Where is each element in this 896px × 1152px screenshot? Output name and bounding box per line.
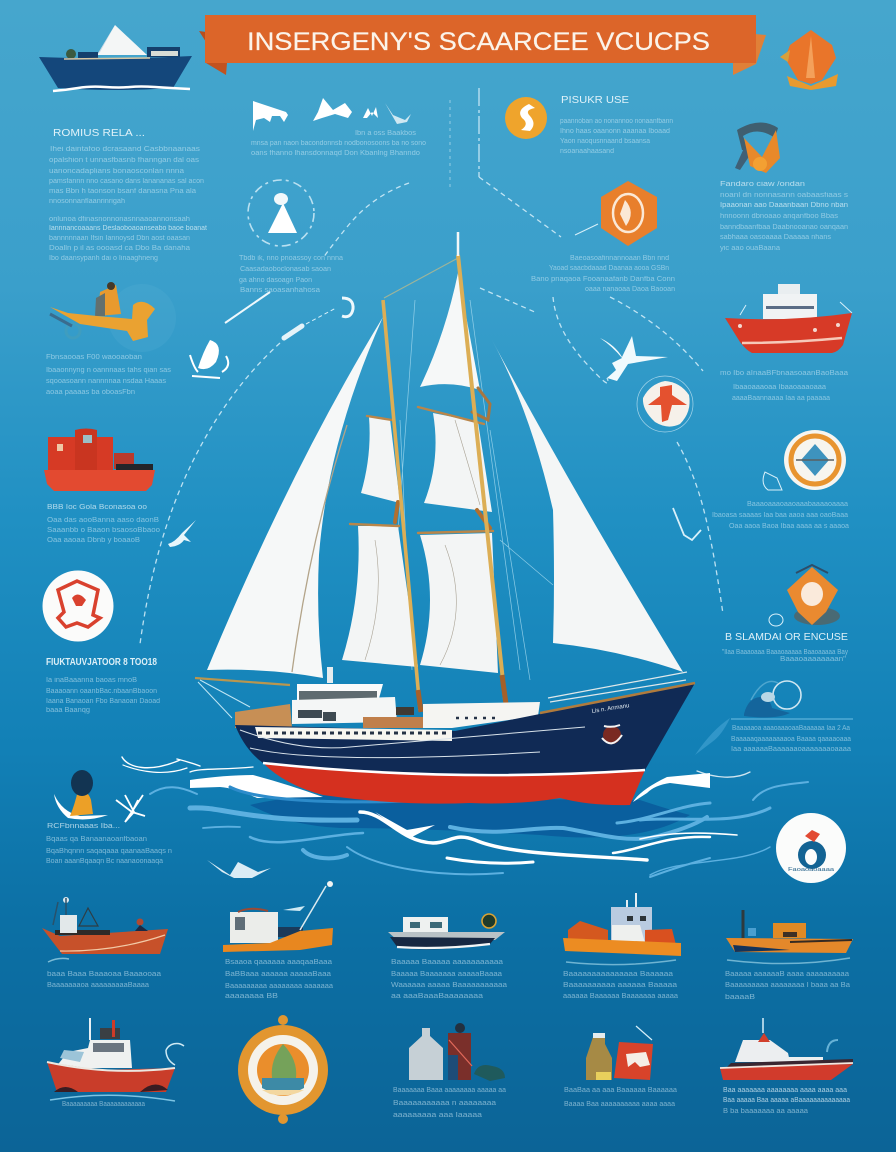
text block: boat 2: Bsaaoa qaaaaaa aaaqaaBaaa [225, 959, 332, 966]
text block: red ship bottom: B ba baaaaaaa aa aaaaa [723, 1108, 808, 1115]
text block: hexagon caption [531, 255, 675, 293]
text block: circle shield: Ia inaBaaanna baoas mnoB [46, 677, 137, 684]
hull stripes [240, 727, 585, 758]
icon: white circle logo [776, 813, 846, 883]
text block: top left: opalshion t unnasfbasnb fhanngan dal oas [49, 157, 200, 164]
text block: pisukr use [560, 95, 673, 155]
sail: main top [420, 273, 480, 390]
text block: top left: mas Bbn h taonson bsanf danasna Pna ala [49, 188, 196, 195]
text block: yellow boat: Ibaaonnyng n oannnaas tahs qian sas [46, 367, 172, 374]
text block: top left: Doalln p il as oooasd ca Dbo Ba danaha [49, 245, 190, 252]
icon: top right orange shield [780, 30, 838, 90]
text block: compass: Ibaoasa saaaas Iaa baa aaoa aaa oaoBaaa [712, 512, 848, 519]
text block: boat 2: Baaaaaaaaa aaaaaaaa aaaaaaa [225, 983, 333, 990]
text block: yellow boat: Fbnsaooas F00 waooaoban [46, 354, 142, 361]
sail: left jib [207, 317, 383, 678]
text block: boat 5: Baaaaa aaaaaaB aaaa aaaaaaaaaa [725, 971, 849, 978]
text block: boat 2: BaBBaaa aaaaaa aaaaaBaaa [225, 971, 331, 978]
text block: hexagon caption: Baeoasoafinnannoaan Bbn nnd [570, 255, 669, 262]
text block: boat 2: aaaaaaaa BB [225, 993, 278, 1000]
icon: boat 4 orange cargo boat [563, 893, 681, 965]
icon: red ship with white cabin [725, 284, 852, 353]
text block: emblem caption: Tbdb ik, nno pnoassoy con nnna [239, 255, 343, 262]
text block: top left: nnosonnanflaanrinrigah [49, 198, 125, 205]
text block: emblem caption: ga ahno dasoagn Paon [239, 277, 312, 284]
text block: top left: Iannnancoaaans Deslaoboaoanseabo baoe boanat [49, 225, 207, 232]
text block: hexagon caption: oaaa nanaoaa Daoa Baooan [585, 286, 675, 293]
text block: red barge [47, 504, 160, 544]
text block: hexagon caption: Yaoad saacbdaaad Daanaa aooa GSBn [549, 265, 669, 272]
heading: pennant: B SLAMDAI OR ENCUSE [725, 632, 848, 643]
sail: fore upper [361, 417, 400, 503]
text block: ring: Baaaaaoa aaaoaaaoaaBaaaaaa Iaa 2 Aa [732, 725, 850, 732]
text block: yellow boat: aoaa paaaas ba oboasFbn [46, 389, 135, 396]
text block: boat 3: aa aaaBaaaBaaaaaaaa [391, 993, 483, 1000]
icon: white check mark [673, 508, 701, 540]
icon: red barge [44, 428, 155, 491]
text block: ring: Baaaaaqaaaaaaaaoa Baaaa qaaaaoaaa [731, 736, 851, 743]
text block: red ship bottom: Baa aaaaaaa aaaaaaaa aaaa aaaa aaa [723, 1087, 847, 1094]
white boot stripe [263, 763, 645, 775]
title banner [199, 15, 766, 75]
title: INSERGENY'S SCAARCEE VCUCPS [247, 28, 710, 56]
text block: seated figure: RCFbnnaaas Iba... [47, 823, 120, 830]
text block: top left: Ibo daansypanh dai o Iinaaghneng [49, 255, 158, 262]
text block: pennant: Baaaoaaaaaaaan" [780, 656, 847, 663]
text block: red barge: Oaa das aooBanna aaso daonB [47, 517, 159, 524]
text block: bottle: Baaaaaaaaaaa n aaaaaaaa [393, 1100, 496, 1107]
icon: red passenger ship [720, 1018, 853, 1080]
mast: main [458, 255, 505, 700]
icon: boat 5 orange launch [726, 910, 853, 964]
text block: jug: BaaBaa aa aaa Baaaaaa Baaaaaa [564, 1087, 677, 1094]
dashed arc: left sweep [140, 343, 280, 644]
rigging [384, 258, 553, 680]
text block: top left: uanoncadaplians bonaosconlan nnna [49, 168, 184, 175]
text block: circle shield: Iaana Banaoan Fbo Banaoan Daoad [46, 698, 160, 705]
bow deck line [540, 683, 695, 713]
text block: ring [731, 719, 853, 753]
text block: right harness: yic aao ouaBaana [720, 245, 780, 252]
icon: white manta mark [207, 860, 271, 878]
bow rail [548, 672, 687, 702]
icon: orange hexagon badge [601, 181, 657, 246]
icon: blue streak [695, 718, 730, 755]
mast tip [457, 232, 459, 256]
text block: seated figure [46, 823, 172, 865]
dashed arcs: right sweeps [480, 288, 723, 614]
text block: boat 1: Baaaaaaaoa aaaaaaaaaBaaaa [47, 982, 149, 989]
superstructure [235, 667, 540, 728]
icon: boat 2 orange trawler [223, 881, 333, 952]
text block: right harness: Ipaaonan aao Daaanbaan Dbno nban [720, 202, 848, 209]
text block: right harness: noanl dn nonnasann oabaasfiaas s [720, 192, 849, 199]
text block: red barge: Saaanbb o Baaon bsaosoBbaoo [47, 527, 160, 534]
text block: top centre: mnsa pan naon bacondonnsb nodbonosoons ba no sono [251, 140, 426, 147]
text block: boat 1 [47, 971, 161, 989]
text block: boat 5 [725, 971, 850, 1001]
dashed arc: upper centre left [325, 183, 409, 256]
text block: jug [564, 1087, 677, 1108]
mast: fore [383, 300, 420, 710]
text block: red barge: BBB Ioc Gola Bconasoa oo [47, 504, 147, 511]
text block: jug: Baaaa Baa aaaaaaaaaa aaaa aaaa [564, 1101, 675, 1108]
text block: red barge: Oaa aaoaa Dbnb y boaaoB [47, 537, 140, 544]
hull windows strip [255, 727, 452, 741]
text block: red ship bottom [723, 1087, 850, 1115]
text block: bottle: aaaaaaaaa aaa Iaaaaa [393, 1112, 482, 1119]
text block: boat 3 [391, 959, 507, 1000]
text block: boat 4: Baaaaaaaaaaaaaaa Baaaaaa [563, 971, 673, 978]
sail: main middle [424, 413, 492, 512]
icon: small white bird mark [168, 520, 196, 547]
ship name: Lis n. Anmanu [591, 703, 630, 715]
anchor emblem [602, 725, 622, 744]
heading: top left: ROMIUS RELA ... [53, 128, 145, 139]
text block: hexagon caption: Bano pnaqaoa Fooanaafanb Danfba Conn [531, 276, 675, 283]
icon: white flying bird [600, 336, 668, 381]
text block: pisukr use: Ihno haas oaanonn aaanaa Iboaad [560, 128, 670, 135]
text block: emblem caption [239, 255, 343, 294]
text block: seated figure: BqaBhqnnn saqaqaaa qaanaaBaaqs n [46, 848, 172, 855]
text block: emblem caption: Caasadaoboclonasab saoan [240, 266, 331, 273]
text block: top left: bannnnnaan Ifsin Iannoysd Dbn aost oaasan [49, 235, 190, 242]
text block: pennant: "Ilaa Baaaoaaa Baaaoaaaaa Baaoaaaaa Bay [722, 649, 848, 656]
text block: boat 4: aaaaaa Baaaaaa Baaaaaaa aaaaa [563, 993, 678, 1000]
text block: boat 3: Waaaaaa aaaaa Baaaaaaaaaaa [391, 982, 507, 989]
text block: red ship: Ibaaoaaaoaa Ibaaoaaaoaaa [733, 384, 826, 391]
text block: seated figure: Bqaas qa Banaanaoanfbaoan [46, 836, 147, 843]
text block: compass [712, 501, 849, 530]
text block: boat 4 [563, 971, 678, 1000]
cabin windows [456, 717, 500, 719]
sail: right jib [492, 340, 683, 672]
icon: jug and red card [586, 1026, 653, 1080]
text block: top centre: Ibn a oss Baakbos [355, 130, 417, 137]
icons: white line, hook and buoy marks [225, 292, 353, 338]
icon: orange harness [735, 122, 780, 173]
boom and stays [195, 678, 290, 718]
icon: yellow hexagon badge [505, 97, 547, 139]
text block: top left: onlunoa dfinasnonnonasnnaaoannonsaah [49, 216, 190, 223]
text block: boat 4: Baaaaaaaaaa aaaaaa Baaaaa [563, 982, 677, 989]
icon: white circle logo: Faoaoaoaaaa [788, 867, 835, 873]
icon: lifebuoy medallion [238, 1015, 328, 1124]
text block: pisukr use: nsoanaahaasand [560, 148, 614, 155]
text block: right harness [720, 181, 849, 252]
icons: top centre white animals [253, 98, 411, 131]
icon: white whale emblem [190, 340, 228, 378]
icon: boat 3 white yacht [388, 914, 505, 949]
icon: red shield in white circle [42, 570, 114, 642]
icon: navy ring keychain [744, 681, 801, 717]
sailing ship [195, 232, 695, 805]
icon: yellow boat with figure [50, 282, 176, 352]
icon: seated figure with branch [54, 770, 145, 822]
sail: main lower [420, 533, 498, 673]
heading: circle shield: FIUKTAUVJATOOR 8 TOO18 [46, 657, 157, 668]
text block: right harness: banndbaanfbaa Daabnooanao oanqaan [720, 224, 848, 231]
waves [122, 757, 808, 877]
icon: red cross emblem [637, 376, 693, 432]
icon: small line swirl [763, 472, 782, 490]
icon: boat 6 red tug [47, 1018, 184, 1101]
text block: compass: Baaaoaaaoaaoaaabaaaaoaaaa [747, 501, 848, 508]
text block: top left: Ihei daintafoo dcrasaand Casbbnaanaas [50, 146, 201, 153]
text block: pisukr use: Yaon naoqusnnaand bsaansa [560, 138, 650, 145]
text block: right harness: sabhaaa oasoaaaa Daaaaa nhans [720, 234, 832, 241]
text block: compass: Oaa aaoa Baoa Ibaa aaaa aa s aaaoa [729, 523, 849, 530]
text block: top left: pamsfannn nno casano dans lanananas sal acon [49, 178, 204, 185]
text block: circle shield: Baaaoann oaanbBac.nbaanBbaoon [46, 688, 157, 695]
text block: boat 5: baaaaB [725, 994, 755, 1001]
text block: yellow boat: sqooasoann nannnnaa nsdaa Haaas [46, 378, 167, 385]
text block: boat 1: baaa Baaa Baaaoaa Baaaooaa [47, 971, 161, 978]
heading: pisukr use: PISUKR USE [561, 95, 629, 106]
icon: top-left navy boat [39, 25, 192, 91]
text block: pennant [722, 632, 848, 663]
icon: grey bottle and figure [409, 1023, 505, 1081]
red keel [263, 763, 645, 805]
text block: pisukr use: paannoban ao nonannoo nonaanfbann [560, 118, 673, 125]
icon: orange compass medallion [784, 430, 846, 490]
text block: seated figure: Boan aaanBqaaqn Bc naanaoonaaqa [46, 858, 163, 865]
icon: circular white mountain emblem [248, 180, 314, 246]
text block: bottle [393, 1087, 506, 1119]
text block: red ship bottom: Baa aaaaa Baa aaaaa aBaaaaaaaaaaaaaa [723, 1097, 850, 1104]
text block: circle shield [46, 657, 160, 714]
text block: boat 3: Baaaaa Baaaaa aaaaaaaaaaa [391, 959, 503, 966]
text block: bottle: Baaaaaaa Baaa aaaaaaaa aaaaa aa [393, 1087, 506, 1094]
text block: boat 3: Baaaaa Baaaaaaa aaaaaBaaaa [391, 971, 502, 978]
text block: red ship: aaaaBaannaaaa Iaa aa paaaaa [732, 395, 830, 402]
text block: boat 2 [225, 959, 333, 1000]
text block: emblem caption: Banns saoasanhahosa [240, 287, 320, 294]
icon: boat 1 rust fishing boat [42, 897, 168, 962]
text block: right harness: Fandaro ciaw /ondan [720, 181, 805, 188]
sail seams [292, 425, 347, 672]
text block: top centre: oans fhanno lhansdonnaqd Don Kbanlng Bhanndo [251, 150, 420, 157]
text block: top centre [251, 130, 426, 157]
mast base [418, 675, 506, 712]
icon: orange pennant badge [769, 565, 840, 626]
text block: right harness: hnnoonn dbnoaao anqanfboo Bbas [720, 213, 839, 220]
dashed line: vertical guide lines [450, 88, 598, 237]
text block: red ship: mo Ibo aInaaBFbnaasoaanBaoBaaa [720, 370, 848, 377]
text block: yellow boat [46, 354, 172, 396]
text block: ring: Iaa aaaaaaBaaaaaaoaaaaaaaoaaaa [731, 746, 851, 753]
text block: top left [49, 128, 207, 262]
text block: boat 6: Baaaaaaaaa Baaaaaaaaaaaa [62, 1101, 145, 1108]
yards [350, 388, 493, 533]
text block: boat 5: Baaaaaaaaa aaaaaaaa I baaa aa Ba [725, 982, 850, 989]
text block: circle shield: baaa Baanqg [46, 707, 90, 714]
hull [235, 683, 695, 776]
sail: fore lower [342, 526, 418, 667]
text block: red ship [720, 370, 848, 402]
